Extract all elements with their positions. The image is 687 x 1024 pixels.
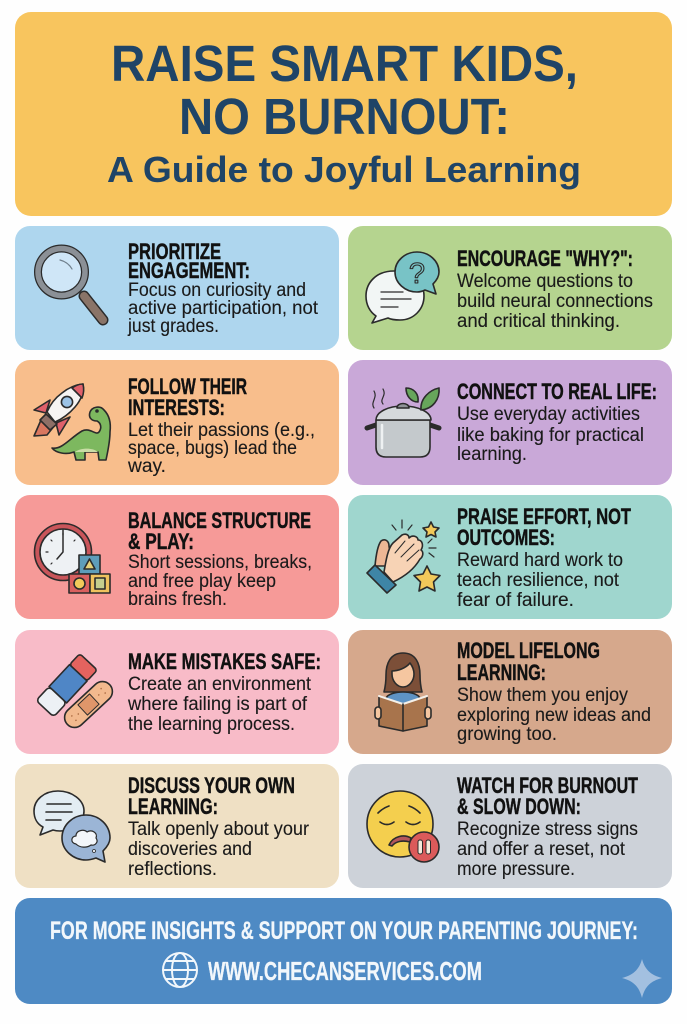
text: follow their interests: Let their passions (e.g., — [128, 420, 315, 441]
text: discuss your own learning: LEARNING: — [128, 794, 218, 819]
icon: globe — [163, 953, 197, 987]
text: discuss your own learning — [128, 773, 310, 880]
text: discuss your own learning: reflections. — [128, 859, 217, 880]
header panel — [15, 12, 672, 216]
text: praise effort: fear of failure. — [457, 590, 574, 611]
icon: person reading a book — [375, 653, 431, 731]
text: encourage why: Welcome questions to — [457, 271, 633, 292]
text: discuss your own learning: discoveries and — [128, 839, 252, 860]
text: encourage why — [457, 246, 653, 332]
title: A Guide to Joyful Learning — [107, 149, 581, 190]
text: prioritize engagement — [127, 239, 319, 337]
icon: rocket and dinosaur — [34, 384, 110, 460]
text: encourage why: and critical thinking. — [457, 311, 620, 332]
icon: clock and toy blocks — [34, 524, 110, 593]
panel: follow their interests — [15, 360, 339, 485]
text: balance structure and play: BALANCE STRUCTURE — [128, 508, 311, 533]
panel: praise effort — [348, 495, 672, 619]
icon: tired face with pause badge — [367, 791, 439, 862]
text: connect to real life: Use everyday activities — [457, 404, 640, 425]
text: praise effort: Reward hard work to — [457, 550, 623, 571]
text: balance structure and play: Short sessions, breaks, — [128, 552, 312, 573]
text: follow their interests — [127, 374, 315, 477]
text: model lifelong learning: growing too. — [457, 724, 557, 745]
text: model lifelong learning: MODEL LIFELONG — [457, 638, 600, 663]
text: watch for burnout: more pressure. — [457, 859, 575, 880]
text: prioritize engagement: Focus on curiosity and — [128, 280, 306, 301]
text: model lifelong learning: LEARNING: — [457, 660, 546, 685]
title — [107, 35, 581, 190]
text: make mistakes safe: Create an environment — [128, 674, 312, 695]
icon: cooking pot with leaves — [367, 388, 439, 457]
text: model lifelong learning: Show them you enjoy — [457, 685, 628, 706]
panel: connect to real life — [348, 360, 672, 485]
text: connect to real life: like baking for practical — [457, 425, 644, 446]
text: balance structure and play — [128, 508, 312, 610]
text: balance structure and play: & PLAY: — [128, 529, 194, 554]
website address: WWW.CHECANSERVICES.COM — [208, 956, 482, 986]
text: praise effort: PRAISE EFFORT, NOT — [457, 504, 631, 529]
panel: encourage why — [348, 226, 672, 350]
text: connect to real life: learning. — [457, 444, 527, 465]
text: make mistakes safe: where failing is part of — [127, 694, 308, 715]
text: prioritize engagement: ENGAGEMENT: — [128, 258, 250, 283]
panel: discuss your own learning — [15, 764, 339, 888]
text: connect to real life — [457, 379, 657, 465]
text: watch for burnout: & SLOW DOWN: — [457, 794, 581, 819]
text: follow their interests: space, bugs) lead the — [128, 438, 297, 459]
text: follow their interests: way. — [127, 456, 166, 477]
text: make mistakes safe — [127, 649, 321, 735]
text: discuss your own learning: DISCUSS YOUR OWN — [128, 773, 295, 798]
title: RAISE SMART KIDS, — [111, 35, 578, 92]
icon: speech and thought bubbles — [34, 791, 110, 862]
text: make mistakes safe: the learning process. — [128, 714, 295, 735]
icon: speech bubbles with question mark: ? — [409, 258, 425, 290]
panel: prioritize engagement — [15, 226, 339, 350]
text: praise effort: OUTCOMES: — [457, 525, 555, 550]
text: praise effort: teach resilience, not — [457, 570, 620, 591]
icon: sparkle — [622, 959, 662, 998]
footer banner — [15, 898, 672, 1004]
text: encourage why: build neural connections — [457, 291, 653, 312]
text: balance structure and play: and free play keep — [128, 571, 276, 592]
icon: clapping hands with stars — [367, 520, 440, 593]
panel: watch for burnout — [348, 764, 672, 888]
text: make mistakes safe: MAKE MISTAKES SAFE: — [128, 649, 321, 674]
text: watch for burnout: and offer a reset, not — [457, 839, 626, 860]
text: model lifelong learning: exploring new ideas and — [457, 705, 651, 726]
panel: model lifelong learning — [348, 630, 672, 754]
text: praise effort — [457, 504, 631, 611]
text: balance structure and play: brains fresh. — [128, 589, 227, 610]
text: model lifelong learning — [457, 638, 651, 745]
icon: eraser and bandage — [36, 654, 117, 732]
panel: make mistakes safe — [15, 630, 339, 754]
text: watch for burnout — [457, 773, 638, 880]
text: watch for burnout: Recognize stress signs — [457, 819, 638, 840]
icon: magnifying glass — [38, 248, 103, 320]
text: prioritize engagement: just grades. — [127, 316, 219, 337]
text: discuss your own learning: Talk openly about your — [128, 819, 310, 840]
text: prioritize engagement: active participation, not — [128, 298, 319, 319]
icon: speech bubbles with question mark — [366, 252, 439, 323]
title: NO BURNOUT: — [179, 88, 510, 145]
panel: balance structure and play — [15, 495, 339, 619]
text: prioritize engagement: PRIORITIZE — [128, 239, 221, 264]
text: follow their interests: INTERESTS: — [128, 395, 225, 420]
text: follow their interests: FOLLOW THEIR — [128, 374, 247, 399]
